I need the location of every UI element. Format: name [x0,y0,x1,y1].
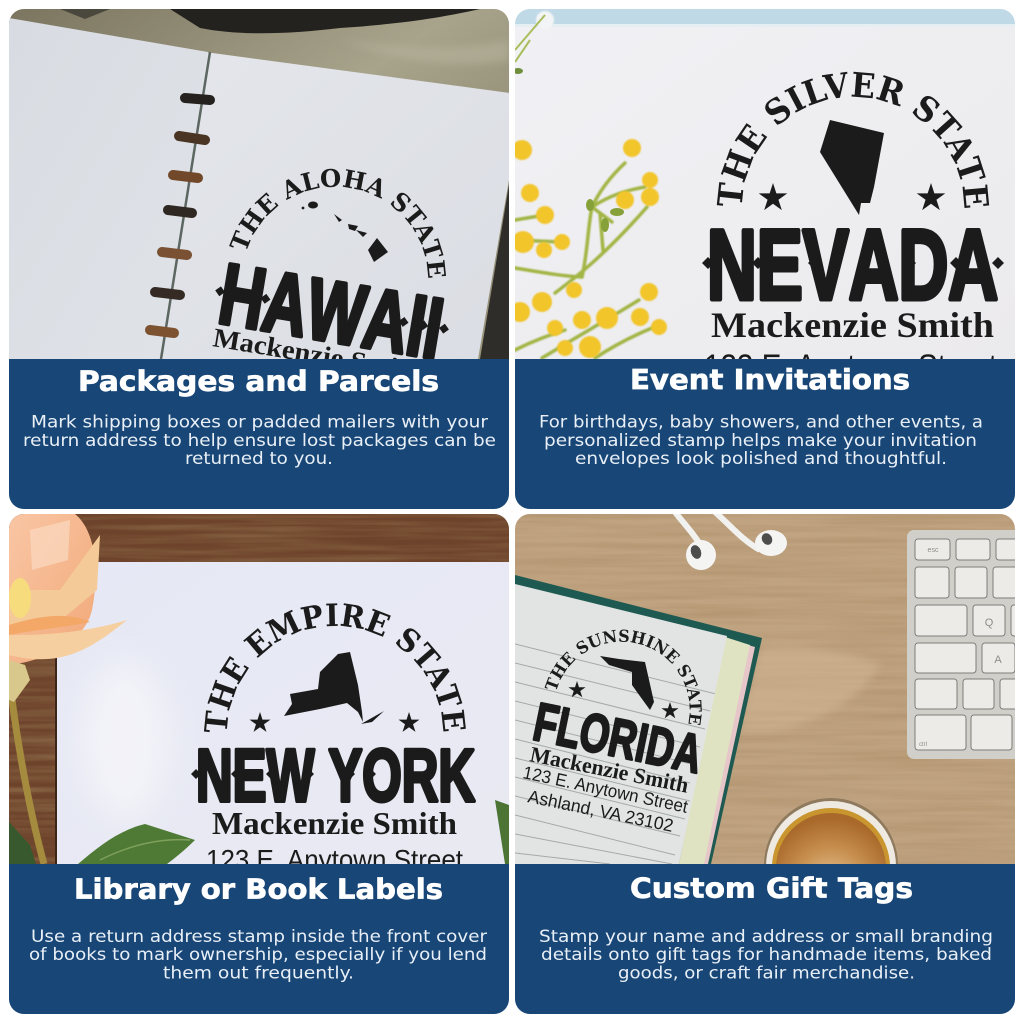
photo: paper on dark wood with peach rose [9,514,509,864]
recipient name: Mackenzie Smith [212,805,457,841]
description: personalized stamp helps make your invitation [544,431,977,451]
icon: right star [399,712,419,732]
city and zip: Ashland, VA 23102 [526,786,675,836]
description: envelopes look polished and thoughtful. [575,449,947,469]
description: For birthdays, baby showers, and other events, a [539,412,983,432]
coffee cup [764,798,898,932]
photo: envelope with yellow flowers [510,9,1015,359]
description: of books to mark ownership, especially if you lend [29,945,487,965]
icon: Florida outline [600,656,654,710]
description: Mark shipping boxes or padded mailers with your [31,412,488,432]
panel: library or book labels [9,514,509,1014]
icon: right star [661,702,679,718]
description: return address to help ensure lost packages can be [23,431,496,451]
description: returned to you. [185,449,333,469]
description [539,412,983,469]
keyboard: A [994,654,1002,666]
photo: spiral notebook on khaki cloth [9,9,510,359]
caption band [9,359,509,509]
state name: New York [191,747,476,804]
icon: Nevada outline [820,120,884,215]
recipient name: Mackenzie Smith [711,305,994,345]
panel: custom gift tags [515,514,1015,1014]
caption band [515,359,1015,509]
recipient name: Mackenzie Smith [528,741,691,798]
street address: 123 E. Anytown Street [521,762,690,817]
heading: Event Invitations [630,363,910,396]
panel: event invitations [515,9,1015,509]
description [23,412,496,469]
keyboard: ctrl [919,742,927,748]
heading: Library or Book Labels [74,872,443,906]
icon: right star [917,183,945,210]
photo: desk with book, keyboard, earbuds and coffee [515,514,1015,864]
caption band [515,864,1015,1014]
description [539,927,993,984]
arc text: the aloha state: THE ALOHA STATE [229,168,446,278]
stamp imprint: Nevada [702,72,1004,359]
arc text: the silver state: THE SILVER STATE [716,72,990,208]
earbuds [675,512,787,570]
icon: Hawaiian islands [302,202,388,262]
state name: Hawaii: HAWAII [213,246,450,378]
keyboard: esc [928,547,939,554]
state name: Florida: FLORIDA [529,692,707,785]
description: Use a return address stamp inside the front cover [31,927,487,947]
description: them out frequently. [163,964,354,984]
open book [515,575,762,864]
panel: packages and parcels [9,9,509,509]
icon: left star [568,681,586,697]
icon: left star [759,183,787,210]
stamp imprint: Florida [523,630,702,832]
icon: left star [250,712,270,732]
caption band [9,864,509,1014]
arc text: the sunshine state: THE SUNSHINE STATE [544,630,702,725]
arc text: the empire state: THE EMPIRE STATE [204,603,466,732]
state name: Nevada [702,228,1004,302]
state name: New York: NEW YORK [196,734,475,817]
heading: Packages and Parcels [78,364,439,398]
stamp imprint: New York [191,603,476,864]
icon: New York outline [284,652,384,724]
heading: Custom Gift Tags [630,872,913,904]
description [29,927,487,984]
state name: Hawaii [215,262,449,359]
description: goods, or craft fair merchandise. [618,964,915,984]
recipient name: Mackenzie Smith [211,322,425,387]
description: details onto gift tags for handmade items, baked [541,945,992,965]
keyboard: Q [985,617,994,629]
keyboard [907,530,1024,759]
street address: 123 E. Anytown Street [206,844,463,875]
description: Stamp your name and address or small branding [539,927,993,947]
stamp imprint: Hawaii [212,168,449,359]
